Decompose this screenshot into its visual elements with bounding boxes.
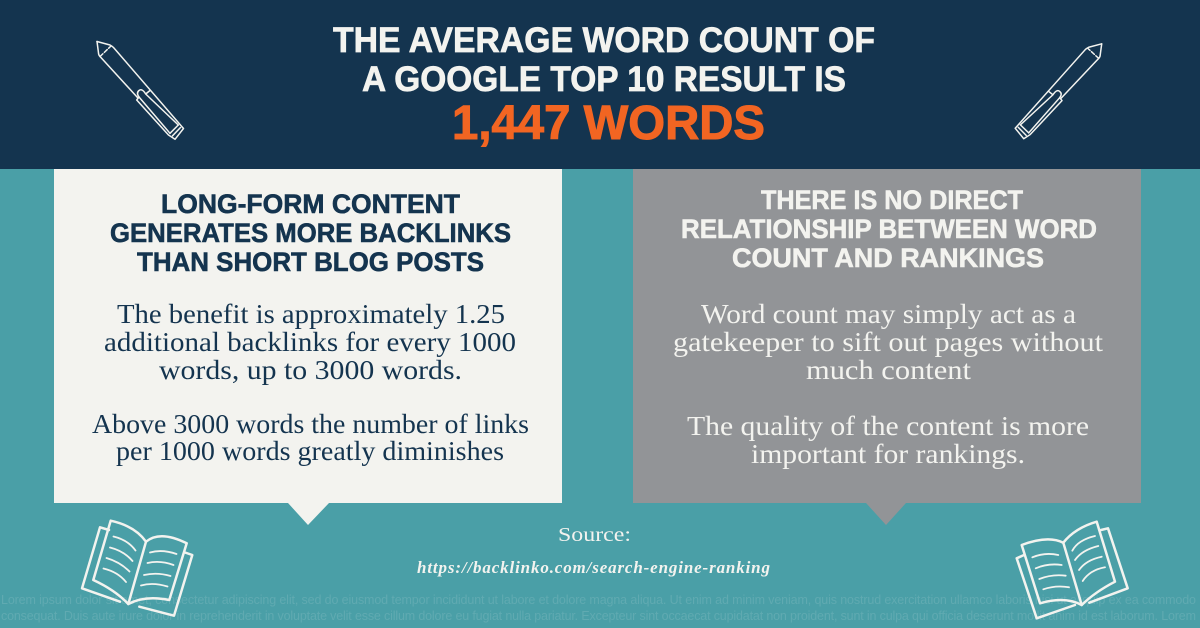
- heading left: LONG-FORM CONTENT: [161, 189, 460, 219]
- body text right: Word count may simply act as a: [701, 299, 1076, 329]
- source url: https://backlinko.com/search-engine-ranking: [417, 558, 770, 577]
- source label: Source:: [558, 524, 631, 546]
- title: 1,447 WORDS: [452, 97, 765, 150]
- filler lorem text: Lorem ipsum dolor sit amet, consectetur adipiscing elit, sed do eiusmod tempor incididunt ut labore et dolore magna aliqua. Ut enim ad minim veniam, quis nostrud exercitation ullamco laboris nisi ut aliquip ex ea commodo: [1, 593, 1196, 607]
- heading right: [681, 185, 1097, 273]
- body text right: important for rankings.: [751, 439, 1025, 469]
- body text left: per 1000 words greatly diminishes: [116, 436, 504, 466]
- heading right: RELATIONSHIP BETWEEN WORD: [681, 214, 1097, 244]
- filler lorem text: [1, 593, 1196, 623]
- body text right: The quality of the content is more: [687, 411, 1089, 441]
- body text right: [673, 299, 1104, 469]
- title: THE AVERAGE WORD COUNT OF: [333, 21, 875, 60]
- body text left: The benefit is approximately 1.25: [117, 299, 505, 329]
- panel background right: [633, 169, 1141, 525]
- panel background left: [54, 169, 562, 525]
- panel: no direct relationship: [633, 169, 1141, 525]
- heading left: THAN SHORT BLOG POSTS: [137, 247, 484, 277]
- heading left: [110, 189, 511, 277]
- filler lorem text: consequat. Duis aute irure dolor in reprehenderit in voluptate velit esse cillum dolore eu fugiat nulla pariatur. Excepteur sint occaecat cupidatat non proident, sunt in culpa qui officia deserunt mollit anim id est laborum. Lorem: [1, 609, 1196, 623]
- body text left: [92, 299, 529, 466]
- body text left: words, up to 3000 words.: [159, 355, 462, 385]
- heading left: GENERATES MORE BACKLINKS: [110, 218, 511, 248]
- body text right: much content: [806, 355, 972, 385]
- body text left: additional backlinks for every 1000: [104, 327, 516, 357]
- header band: [0, 0, 1200, 169]
- title: [333, 21, 875, 150]
- title: A GOOGLE TOP 10 RESULT IS: [362, 60, 846, 99]
- body text left: Above 3000 words the number of links: [92, 409, 529, 439]
- body text right: gatekeeper to sift out pages without: [673, 327, 1104, 357]
- icon: pencil right: [1015, 44, 1102, 139]
- icon: pencil left: [97, 42, 184, 139]
- heading right: THERE IS NO DIRECT: [761, 185, 1023, 215]
- icon: open book left: [82, 521, 192, 616]
- heading right: COUNT AND RANKINGS: [732, 243, 1044, 273]
- panel: long-form content: [54, 169, 562, 525]
- icon: open book right: [1017, 522, 1128, 618]
